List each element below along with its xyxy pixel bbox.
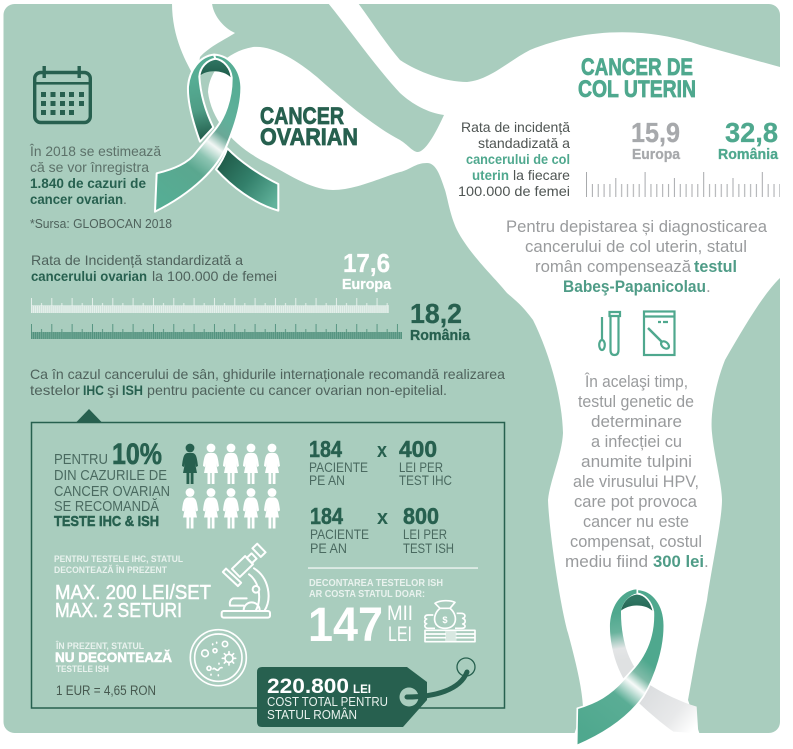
- text: HPV genetic test: .: [704, 552, 709, 571]
- uterus silhouette: [172, 3, 793, 735]
- source note: *Sursa: GLOBOCAN 2018: [30, 217, 172, 231]
- title: cancer de col uterin: CANCER DE: [581, 54, 693, 81]
- title: cancer ovarian: [260, 103, 358, 151]
- title: cancer de col uterin: COL UTERIN: [578, 76, 696, 103]
- calculation: IHC cost: x: [377, 440, 387, 462]
- text: HPV genetic test: cancer nu este: [583, 512, 689, 531]
- ruler: Europa: [31, 298, 389, 313]
- text: Babes-Papanicolau test: Pentru depistarea și diagnosticarea: [506, 217, 768, 236]
- tag text: [267, 675, 388, 722]
- text: ISH not reimbursed: [55, 640, 172, 675]
- calculation: IHC cost: TEST IHC: [399, 472, 452, 488]
- text: ISH reimbursement would cost 147 thousand lei: AR COSTA STATUL DOAR:: [309, 589, 425, 600]
- calculation: ISH cost: PACIENTE: [310, 526, 369, 542]
- calculation: ISH cost: LEI PER: [403, 526, 447, 542]
- text: HPV genetic test: care pot provoca: [574, 492, 698, 511]
- tag text: LEI: [353, 682, 371, 696]
- price tag: total cost: [257, 658, 475, 727]
- text: ISH reimbursement would cost 147 thousand lei: 147: [308, 599, 383, 652]
- text: HPV genetic test: mediu fiind: [565, 552, 648, 571]
- text: HPV genetic test: ale virusului HPV,: [573, 472, 699, 491]
- icon: microscope: [222, 544, 270, 618]
- text: ISH reimbursement would cost 147 thousand lei: MII: [387, 602, 413, 625]
- value: România 32,8: România: [718, 146, 779, 163]
- value: România 32,8: 32,8: [725, 117, 778, 148]
- text: ovarian incidence rate: [31, 252, 277, 284]
- value: Europa 15,9: Europa: [632, 146, 681, 163]
- calculation: ISH cost: TEST ISH: [403, 540, 454, 556]
- icon: sample bag with swab: [644, 312, 674, 355]
- text: 10% of ovarian cancer cases: CANCER OVARIAN: [54, 483, 170, 500]
- text: HPV genetic test: compensat, costul: [570, 532, 702, 551]
- text: HPV genetic test: 300 lei: [653, 552, 704, 571]
- text: IHC reimbursement: MAX. 200 LEI/SET: [55, 582, 211, 604]
- text: ISH not reimbursed: NU DECONTEAZĂ: [55, 649, 172, 665]
- calculation: ISH cost: [310, 503, 454, 556]
- icon: petri dish: [190, 630, 246, 686]
- text: Babes-Papanicolau test: [506, 217, 768, 296]
- text: ISH not reimbursed: ÎN PREZENT, STATUL: [55, 640, 144, 652]
- value: România 18,2: 18,2: [410, 298, 462, 329]
- ribbon: ovarian cancer: [155, 55, 278, 212]
- tag text: 220.800: [267, 675, 349, 698]
- text: 10% of ovarian cancer cases: DIN CAZURILE DE: [54, 467, 167, 484]
- text: 10% of ovarian cancer cases: TESTE IHC & ISH: [54, 513, 159, 530]
- calculation: ISH cost: x: [377, 507, 388, 529]
- icon: swab and test tube: [599, 312, 620, 355]
- tag text: STATUL ROMÂN: [267, 707, 357, 722]
- text: ovarian incidence rate: Rata de Incidență standardizată a: [31, 252, 243, 268]
- text: Babes-Papanicolau test: cancerului de col uterin, statul: [525, 237, 747, 256]
- calculation: ISH cost: 800: [403, 503, 439, 529]
- calculation: IHC cost: 184: [309, 436, 342, 462]
- text: HPV genetic test: anumite tulpini: [581, 452, 692, 471]
- value: Europa 15,9: 15,9: [631, 117, 680, 148]
- text: HPV genetic test: [565, 372, 709, 571]
- text: ISH not reimbursed: TESTELE ISH: [56, 664, 109, 675]
- tag text: COST TOTAL PENTRU: [267, 694, 388, 709]
- text: Babes-Papanicolau test: Babeş-Papanicolau: [563, 277, 706, 296]
- text: HPV genetic test: În acelaşi timp,: [584, 372, 688, 391]
- text: Babes-Papanicolau test: testul: [694, 257, 737, 276]
- calculation: IHC cost: PE AN: [309, 472, 345, 488]
- value: România 18,2: [410, 298, 471, 344]
- text: 10% of ovarian cancer cases: 10%: [112, 438, 162, 471]
- icon: money bag and coins: $: [442, 615, 448, 625]
- text: IHC and ISH recommendation: pentru paciente cu cancer ovarian non-epitelial.: [147, 382, 447, 398]
- text: IHC and ISH recommendation: ISH: [122, 382, 143, 398]
- text: 10% of ovarian cancer cases: PENTRU: [54, 451, 108, 468]
- value: România 18,2: România: [410, 327, 471, 344]
- text: IHC and ISH recommendation: IHC: [83, 382, 104, 398]
- text: ISH reimbursement would cost 147 thousand lei: DECONTAREA TESTELOR ISH: [309, 578, 443, 589]
- value: Europa 15,9: [631, 117, 681, 163]
- text: Babes-Papanicolau test: .: [706, 277, 711, 296]
- exchange rate note: 1 EUR = 4,65 RON: [56, 683, 156, 698]
- text: HPV genetic test: testul genetic de: [578, 392, 694, 411]
- text: ovarian incidence rate: cancerului ovarian: [31, 268, 147, 284]
- panel frame with pointer: [32, 409, 504, 708]
- text: ovarian cases estimate: că se vor înregistra: [30, 159, 149, 175]
- text: cervical incidence rate: Rata de incidență: [461, 119, 570, 135]
- text: ovarian incidence rate: la 100.000 de femei: [152, 268, 277, 284]
- icon: calendar: [35, 66, 90, 122]
- text: ISH reimbursement would cost 147 thousand lei: [308, 578, 443, 652]
- title: cancer ovarian: CANCER: [260, 103, 344, 130]
- value: Europa 17,6: 17,6: [343, 248, 390, 278]
- text: IHC reimbursement: DECONTEAZĂ ÎN PREZENT: [54, 564, 167, 576]
- text: cervical incidence rate: uterin: [472, 167, 509, 183]
- calculation: IHC cost: PACIENTE: [309, 459, 368, 475]
- text: ISH reimbursement would cost 147 thousand lei: LEI: [388, 623, 412, 646]
- value: Europa 17,6: [342, 248, 392, 293]
- title: cancer de col uterin: [578, 54, 696, 103]
- calculation: ISH cost: 184: [310, 503, 343, 529]
- text: ovarian cases estimate: [29, 143, 161, 207]
- icon group: ten women, one highlighted: [182, 444, 280, 528]
- calculation: IHC cost: 400: [399, 436, 437, 462]
- value: Europa 17,6: Europa: [342, 276, 392, 293]
- chart: cervical incidence ruler: [586, 172, 780, 197]
- chart: ovarian incidence rulers: [31, 248, 471, 344]
- text: IHC and ISH recommendation: şi: [107, 382, 119, 398]
- text: IHC reimbursement: [54, 554, 211, 622]
- text: IHC and ISH recommendation: testelor: [30, 382, 80, 398]
- calculation: IHC cost: [309, 436, 452, 488]
- text: 10% of ovarian cancer cases: SE RECOMANDĂ: [54, 498, 159, 515]
- text: ovarian cases estimate: 1.840 de cazuri de: [30, 175, 146, 191]
- calculation: ISH cost: PE AN: [310, 540, 347, 556]
- text: 10% of ovarian cancer cases: [54, 438, 170, 530]
- text: cervical incidence rate: [458, 119, 570, 199]
- text: IHC and ISH recommendation: Ca în cazul cancerului de sân, ghidurile internaționale recomandă realizarea: [30, 366, 505, 382]
- icon: money bag and coins: [425, 601, 475, 642]
- text: ovarian cases estimate: În 2018 se estimează: [29, 143, 161, 159]
- calculation: IHC cost: LEI PER: [399, 459, 443, 475]
- ruler: România: [31, 324, 402, 339]
- text: Babes-Papanicolau test: român compensează: [535, 257, 692, 276]
- text: ovarian cases estimate: cancer ovarian: [30, 191, 123, 207]
- text: ovarian cases estimate: .: [123, 191, 127, 207]
- text: cervical incidence rate: cancerului de col: [466, 151, 570, 167]
- text: IHC and ISH recommendation: [30, 366, 505, 398]
- text: cervical incidence rate: standadizată a: [478, 135, 570, 151]
- text: cervical incidence rate: 100.000 de femei: [458, 183, 570, 199]
- text: HPV genetic test: determinare: [591, 412, 682, 431]
- title: cancer ovarian: OVARIAN: [260, 124, 358, 151]
- text: HPV genetic test: a infecției cu: [591, 432, 682, 451]
- text: IHC reimbursement: MAX. 2 SETURI: [55, 600, 182, 622]
- tag shape: [257, 667, 427, 727]
- text: IHC reimbursement: PENTRU TESTELE IHC, STATUL: [54, 554, 183, 565]
- ribbon: cervical cancer: [577, 589, 698, 746]
- text: cervical incidence rate: la fiecare: [513, 167, 570, 183]
- tag ring: [457, 658, 475, 676]
- panel: test costs: [32, 409, 504, 727]
- value: România 32,8: [718, 117, 779, 163]
